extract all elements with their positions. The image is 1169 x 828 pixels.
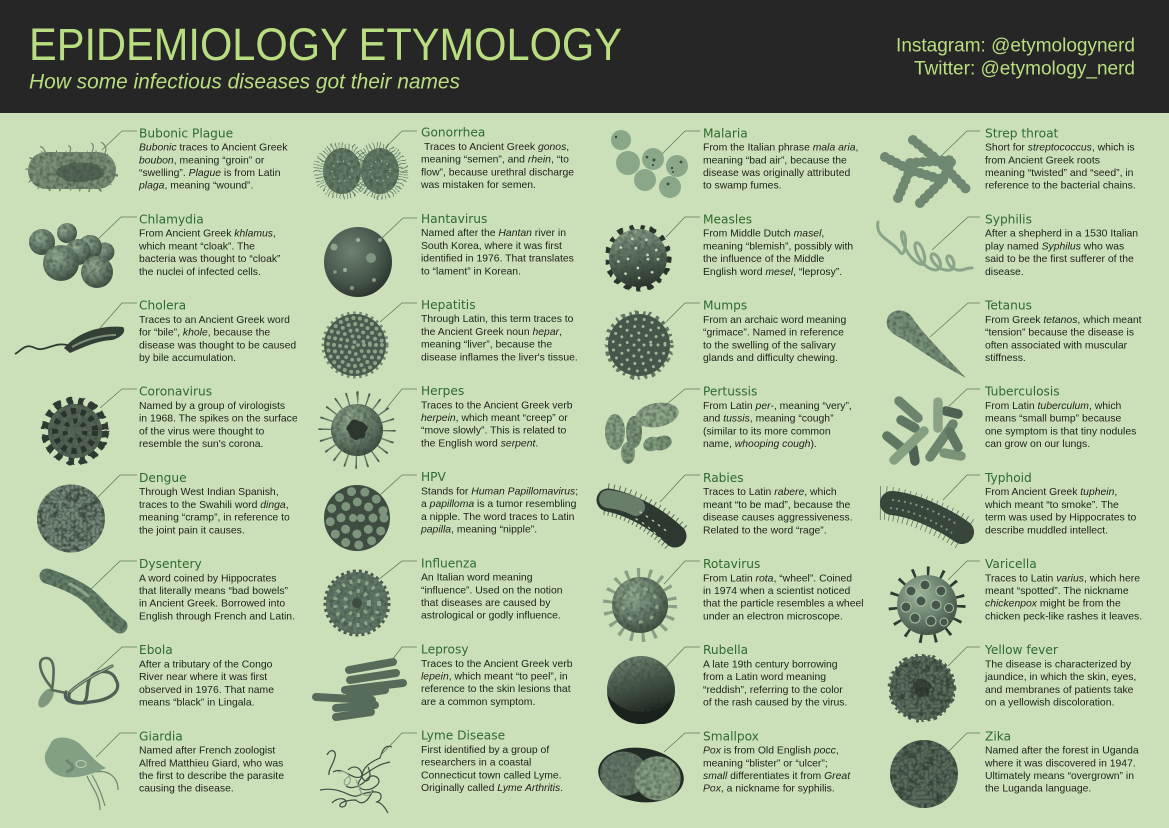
description: which meant “cloak”. The: [138, 241, 255, 252]
entry: Tuberculosis: Tuberculosis: [984, 385, 1060, 399]
description: glands and difficulty chewing.: [703, 353, 838, 364]
description: Named by a group of virologists: [139, 401, 285, 412]
icon: dengue virus: [37, 484, 105, 552]
description: Through West Indian Spanish,: [139, 487, 279, 498]
description: “move slowly”. This is related to: [421, 426, 567, 437]
description: River near where it was first: [139, 672, 267, 683]
description: to the swelling of the salivary: [703, 340, 837, 351]
description: on a yellowish discoloration.: [985, 698, 1114, 709]
entry: Pertussis: Pertussis: [703, 385, 757, 399]
entry: Dysentery: Dysentery: [139, 557, 202, 571]
icon: syphilis spirochete: [878, 222, 972, 270]
icon: smallpox virus: [595, 742, 687, 808]
description: boubon, meaning “groin” or: [139, 155, 264, 166]
description: “grimace”. Named in reference: [703, 328, 844, 339]
entry: Herpes: Herpes: [421, 384, 464, 398]
description: English word mesel, “leprosy”.: [703, 267, 842, 278]
icon: influenza virus: [326, 572, 388, 634]
subtitle: How some infectious diseases got their names: [29, 70, 460, 94]
icon: leprosy rods: [316, 662, 403, 717]
entry: Typhoid: Typhoid: [984, 471, 1032, 485]
entry: Dysentery: [47, 557, 295, 626]
description: “swelling”. Plague is from Latin: [139, 168, 280, 179]
icon: rubella virus: [607, 656, 675, 724]
description: From Middle Dutch masel,: [703, 229, 824, 240]
entry: Influenza: Influenza: [421, 556, 477, 570]
description: from a Latin word meaning: [703, 672, 826, 683]
description: describe muddled intellect.: [985, 525, 1108, 536]
description: small differentiates it from Great: [703, 771, 850, 782]
description: flow”, because urethral discharge: [421, 167, 574, 178]
entry: Coronavirus: Coronavirus: [139, 385, 212, 399]
entry: Malaria: [611, 126, 858, 198]
icon: shigella rod: [47, 576, 120, 626]
description: identified in 1976. That translates: [421, 254, 574, 265]
description: From Latin per-, meaning “very”,: [703, 401, 852, 412]
description: “reddish”, referring to the color: [703, 685, 843, 696]
description: under an electron microscope.: [703, 611, 843, 622]
description: astrological or godly influence.: [421, 611, 561, 622]
entry: Dengue: Dengue: [139, 471, 187, 485]
entry: Zika: Zika: [985, 729, 1011, 743]
entry: Rabies: [606, 471, 853, 540]
entry: Strep throat: Strep throat: [985, 126, 1059, 140]
icon: ebola filament: [35, 658, 118, 710]
icon: gonococcus pair: [322, 148, 400, 194]
description: means “black” in Lingala.: [139, 698, 255, 709]
description: can grow on our lungs.: [985, 439, 1090, 450]
description: meaning “cramp”, in reference to: [139, 513, 290, 524]
entry: Leprosy: Leprosy: [421, 642, 469, 656]
description: From Greek tetanos, which meant: [985, 315, 1142, 326]
description: reference to the bacterial chains.: [985, 181, 1136, 192]
description: meant “spotted”. The nickname: [985, 586, 1129, 597]
entry: Syphilis: [878, 212, 1138, 278]
entry: Syphilis: Syphilis: [985, 212, 1032, 226]
description: a papilloma is a tumor resembling: [421, 499, 576, 510]
description: causing the disease.: [139, 784, 234, 795]
description: meaning “semen”, and rhein, “to: [421, 155, 569, 166]
entry: Rotavirus: Rotavirus: [703, 557, 760, 571]
description: Named after French zoologist: [139, 746, 275, 757]
description: From Ancient Greek khlamus,: [139, 229, 276, 240]
description: papilla, meaning “nipple”.: [421, 525, 537, 536]
description: often associated with muscular: [985, 340, 1128, 351]
entry: Tetanus: Tetanus: [984, 299, 1032, 313]
entry: Gonorrhea: Gonorrhea: [421, 126, 485, 140]
description: After a tributary of the Congo: [139, 660, 273, 671]
entry: Cholera: Cholera: [139, 299, 186, 313]
icon: giardia parasite: [45, 737, 118, 810]
entry: Yellow fever: Yellow fever: [984, 643, 1059, 657]
description: to swamp fumes.: [703, 181, 782, 192]
entry: Rabies: Rabies: [703, 471, 744, 485]
description: where it was discovered in 1947.: [984, 758, 1136, 769]
icon: chlamydia cells: [29, 223, 114, 288]
icon: varicella virus: [894, 572, 960, 638]
entry: Giardia: [45, 729, 284, 810]
description: traces to the Swahili word dinga,: [139, 500, 289, 511]
description: the nuclei of infected cells.: [139, 267, 261, 278]
icon: typhoid bacillus: [880, 500, 968, 536]
icon: papillomavirus: [324, 485, 390, 551]
description: English through French and Latin.: [139, 611, 295, 622]
description: in 1968. The spikes on the surface: [139, 414, 298, 425]
description: was mistaken for semen.: [420, 180, 536, 191]
description: Originally called Lyme Arthritis.: [421, 783, 563, 794]
description: The disease is characterized by: [985, 660, 1132, 671]
description: for “bile”, khole, because the: [139, 328, 270, 339]
entry: Varicella: Varicella: [985, 557, 1037, 571]
description: meaning “blister” or “ulcer”;: [703, 758, 828, 769]
icon: herpes virus: [320, 393, 394, 467]
description: that diseases are caused by: [421, 598, 551, 609]
entry: Hepatitis: Hepatitis: [421, 298, 476, 312]
entry: Measles: Measles: [703, 212, 752, 226]
entry: Tuberculosis: [887, 385, 1136, 461]
description: Named after the forest in Uganda: [985, 746, 1139, 757]
entry: Dengue: [37, 471, 290, 552]
icon: tuberculosis rods: [887, 401, 961, 461]
description: to “lament” in Korean.: [421, 266, 521, 277]
description: meaning “bad air”, because the: [703, 155, 847, 166]
description: by bile accumulation.: [139, 353, 236, 364]
description: play named Syphilus who was: [985, 241, 1124, 252]
entry: HPV: HPV: [421, 470, 447, 484]
description: First identified by a group of: [421, 745, 549, 756]
description: lepein, which meant “to peel”, in: [421, 672, 568, 682]
description: a nipple. The word traces to Latin: [421, 512, 575, 523]
entry: Yellow fever: [890, 643, 1136, 720]
description: meaning “liver”, because the: [421, 340, 552, 351]
description: the joint pain it causes.: [139, 525, 245, 536]
entry: Strep throat: [885, 126, 1136, 203]
entry: Hantavirus: Hantavirus: [421, 212, 487, 226]
description: the influence of the Middle: [703, 254, 825, 265]
description: the first to describe the parasite: [139, 771, 284, 782]
entry: Mumps: [607, 299, 846, 377]
description: South Korea, where it was first: [421, 241, 562, 252]
description: “tension” because the disease is: [985, 328, 1134, 339]
description: Pox is from Old English pocc,: [703, 746, 839, 757]
entry: Malaria: Malaria: [703, 126, 748, 140]
description: of the virus were thought to: [139, 426, 265, 437]
icon: hantavirus: [324, 227, 392, 297]
entry: Rubella: Rubella: [703, 643, 748, 657]
icon: streptococcus chains: [885, 140, 967, 203]
entry: Ebola: Ebola: [139, 643, 173, 657]
icon: rotavirus: [609, 574, 671, 636]
description: From Latin rota, “wheel”. Coined: [703, 573, 852, 584]
description: Short for streptococcus, which is: [985, 143, 1135, 154]
description: meaning “twisted” and “seed”, in: [985, 168, 1134, 179]
description: one symptom is that tiny nodules: [985, 426, 1136, 437]
description: the Luganda language.: [985, 784, 1091, 795]
entry: Pertussis: [605, 385, 852, 464]
description: researchers in a coastal: [421, 758, 531, 769]
entry: Zika: [890, 729, 1139, 808]
entry: Mumps: Mumps: [703, 299, 747, 313]
entry: Bubonic Plague: Bubonic Plague: [139, 126, 233, 140]
description: meant “to be mad”, because the: [703, 500, 851, 511]
entry: Herpes: [320, 384, 573, 467]
icon: hepatitis virus: [324, 314, 386, 376]
icon: coronavirus: [45, 401, 105, 461]
description: name, whooping cough).: [703, 439, 817, 450]
description: disease was originally attributed: [703, 168, 851, 179]
description: term was used by Hippocrates to: [985, 513, 1137, 524]
description: plaga, meaning “wound”.: [139, 181, 253, 192]
icon: mumps virus: [607, 313, 671, 377]
entry: Rubella: [607, 643, 847, 724]
entry: Influenza: [326, 556, 563, 634]
description: Bubonic traces to Ancient Greek: [139, 143, 287, 154]
icon: tetanus bacillus: [887, 311, 966, 378]
description: A word coined by Hippocrates: [139, 573, 276, 584]
icon: rabies virus: [606, 499, 677, 540]
entry: Hantavirus: [324, 212, 574, 297]
description: and membranes of patients take: [985, 685, 1134, 696]
description: Traces to an Ancient Greek word: [139, 315, 290, 326]
description: After a shepherd in a 1530 Italian: [985, 229, 1138, 240]
description: From Ancient Greek tuphein,: [985, 487, 1117, 498]
description: said to be the first sufferer of the: [985, 254, 1134, 265]
icon: malaria cells: [611, 130, 688, 198]
header band: [0, 0, 1169, 113]
description: from Ancient Greek roots: [985, 155, 1100, 166]
description: that literally means “bad bowels”: [139, 586, 289, 597]
entry: Giardia: Giardia: [139, 729, 183, 743]
entry: Tetanus: [887, 299, 1142, 378]
description: From the Italian phrase mala aria,: [703, 143, 858, 154]
description: of the rash caused by the virus.: [703, 698, 847, 709]
description: meaning “blemish”, possibly with: [703, 241, 853, 252]
icon: measles virus: [608, 228, 668, 288]
description: A late 19th century borrowing: [703, 660, 838, 671]
description: which meant “to smoke”. The: [984, 500, 1119, 511]
entry: HPV: [324, 470, 578, 551]
description: the English word serpent.: [421, 438, 538, 449]
description: disease was thought to be caused: [139, 340, 296, 351]
description: bacteria was thought to “cloak”: [139, 254, 281, 265]
description: in Ancient Greek. Borrowed into: [139, 599, 285, 610]
description: in 1974 when a scientist noticed: [703, 586, 851, 597]
description: Ultimately means “overgrown” in: [985, 771, 1134, 782]
description: disease inflames the liver's tissue.: [421, 352, 578, 363]
description: From Latin tuberculum, which: [985, 401, 1121, 412]
description: resemble the sun's corona.: [139, 439, 263, 450]
description: Through Latin, this term traces to: [421, 314, 574, 325]
entry: Rotavirus: [609, 557, 864, 636]
description: Related to the word “rage”.: [703, 525, 827, 536]
icon: plague bacillus: [28, 142, 116, 189]
entry: Coronavirus: [45, 385, 298, 461]
description: observed in 1976. That name: [139, 685, 274, 696]
entry: Gonorrhea: [322, 126, 574, 194]
entry: Lyme Disease: [320, 729, 563, 813]
entry: Hepatitis: [324, 298, 578, 376]
entry: Ebola: [35, 643, 274, 710]
social handles: Instagram: @etymologynerd: [896, 36, 1135, 56]
entry: Varicella: [894, 557, 1142, 638]
description: chickenpox might be from the: [985, 599, 1121, 610]
description: Traces to Ancient Greek gonos,: [424, 142, 569, 153]
entry: Smallpox: Smallpox: [703, 729, 759, 743]
entry: Chlamydia: [29, 212, 281, 288]
entry: Bubonic Plague: [28, 126, 288, 192]
description: An Italian word meaning: [421, 573, 533, 584]
description: Pox, a nickname for syphilis.: [703, 784, 835, 795]
icon: borrelia spirochetes: [320, 746, 392, 813]
description: and tussis, meaning “cough”: [703, 414, 834, 425]
description: Traces to the Ancient Greek verb: [421, 659, 573, 670]
title: EPIDEMIOLOGY ETYMOLOGY: [29, 19, 622, 70]
description: reference to the skin lesions that: [421, 684, 571, 695]
social handles: Twitter: @etymology_nerd: [914, 58, 1135, 80]
description: the Ancient Greek noun hepar,: [421, 327, 562, 338]
entry: Chlamydia: Chlamydia: [139, 212, 204, 226]
icon: yellow fever virus: [890, 656, 954, 720]
description: disease causes aggressiveness.: [703, 513, 853, 524]
description: Stands for Human Papillomavirus;: [421, 486, 578, 498]
entry: Lyme Disease: Lyme Disease: [421, 729, 505, 743]
description: disease.: [985, 267, 1024, 278]
entry: Leprosy: [316, 642, 573, 717]
description: Alfred Matthieu Giard, who was: [139, 758, 283, 769]
description: herpein, which meant “creep” or: [421, 413, 568, 424]
icon: vibrio bacterium: [15, 327, 124, 354]
description: (similar to its more common: [703, 426, 831, 437]
description: Traces to Latin rabere, which: [703, 487, 837, 498]
description: Traces to the Ancient Greek verb: [421, 400, 573, 411]
description: means “small bump” because: [985, 414, 1122, 425]
description: Named after the Hantan river in: [421, 228, 566, 239]
description: chicken peck-like rashes it leaves.: [985, 611, 1142, 622]
icon: pertussis bacteria: [605, 399, 681, 464]
description: From an archaic word meaning: [703, 315, 846, 326]
description: stiffness.: [985, 353, 1026, 364]
description: that the particle resembles a wheel: [703, 599, 864, 610]
description: jaundice, in which the skin, eyes,: [984, 672, 1136, 683]
description: “influence”. Used on the notion: [421, 585, 563, 596]
entry: Typhoid: [880, 471, 1137, 536]
description: are a common symptom.: [421, 697, 535, 708]
entry: Cholera: [15, 299, 296, 364]
entry: Measles: [608, 212, 853, 288]
description: Traces to Latin varius, which here: [985, 573, 1140, 584]
description: Connecticut town called Lyme.: [421, 770, 562, 781]
entry: Smallpox: [595, 729, 851, 808]
icon: zika virus: [890, 740, 958, 808]
